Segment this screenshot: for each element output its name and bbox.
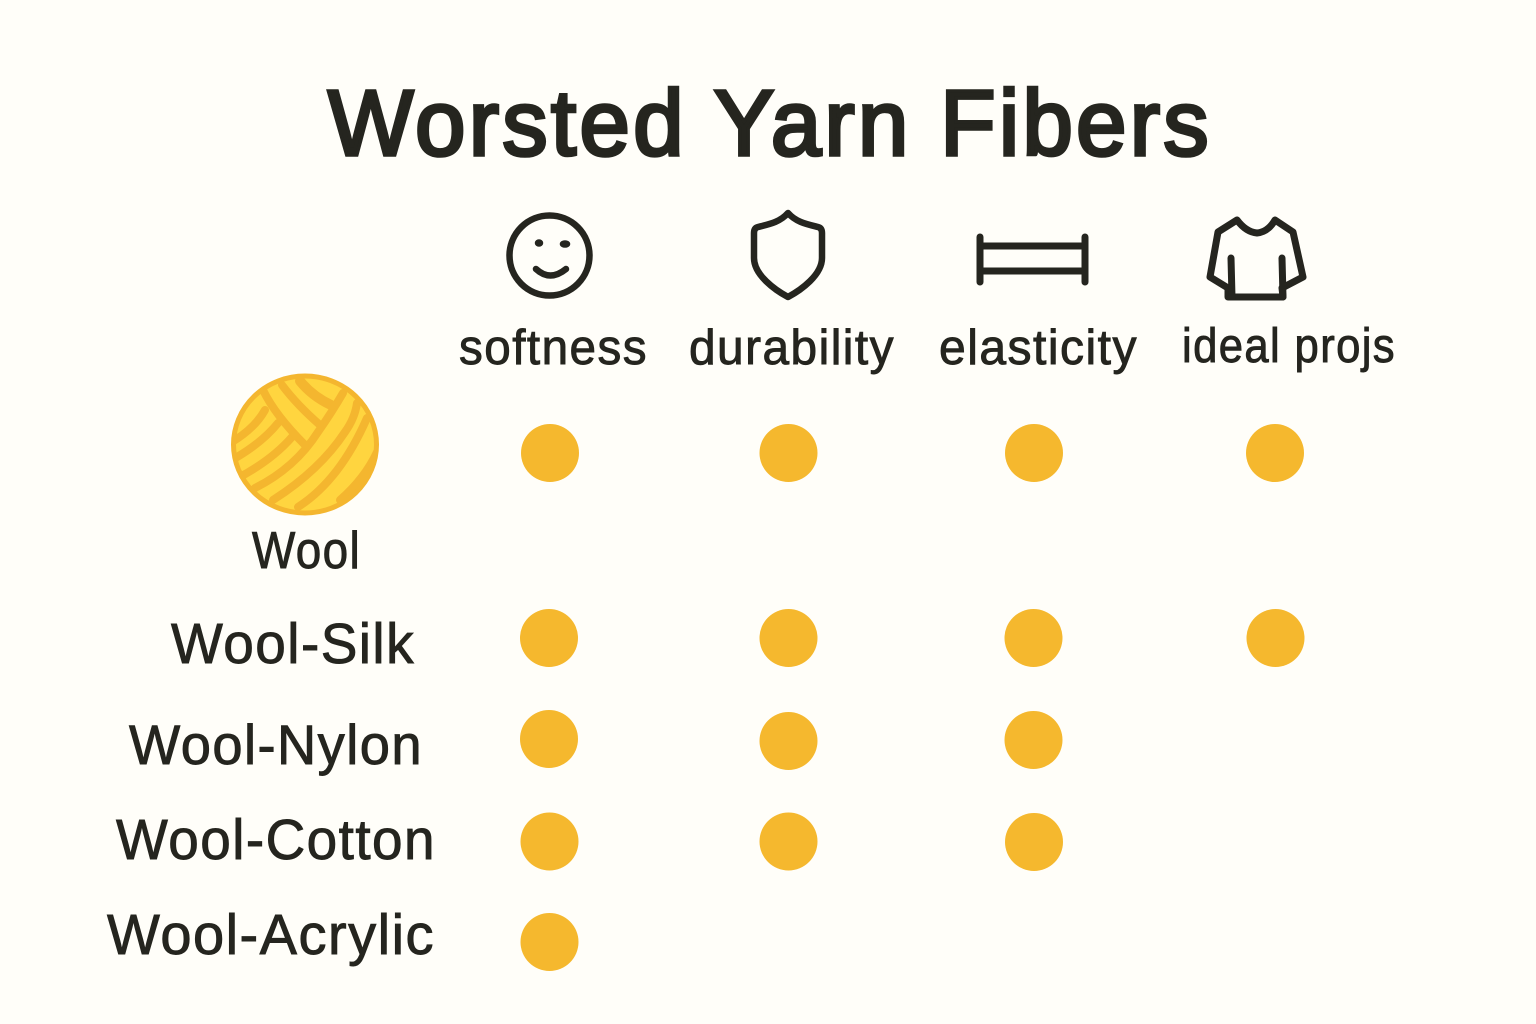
icon: stretch bar	[980, 237, 1085, 282]
label: Wool-Silk: Wool-Silk	[171, 612, 415, 676]
icon: shield	[754, 213, 822, 297]
ratings: Wool-Cotton	[520, 812, 1063, 871]
row: Wool-Acrylic	[107, 903, 578, 971]
column header: elasticity	[939, 237, 1138, 375]
icon: yarn ball	[232, 376, 377, 513]
label: softness: softness	[459, 321, 648, 375]
row: Wool	[232, 376, 1304, 580]
label: durability: durability	[689, 321, 895, 375]
label: ideal projs: ideal projs	[1182, 320, 1396, 373]
column header: ideal projects	[1182, 220, 1396, 373]
column header: durability	[689, 213, 895, 375]
row: Wool-Nylon	[129, 710, 1062, 776]
icon: smiley face	[510, 216, 590, 296]
label: Wool-Nylon: Wool-Nylon	[129, 713, 423, 776]
title: Worsted Yarn Fibers	[328, 71, 1212, 175]
label: elasticity: elasticity	[939, 321, 1138, 375]
ratings: Wool-Acrylic	[520, 913, 578, 971]
row: Wool-Silk	[171, 609, 1304, 676]
ratings: Wool-Nylon	[520, 710, 1062, 770]
label: Wool: Wool	[252, 522, 361, 580]
label: Wool-Acrylic: Wool-Acrylic	[107, 903, 435, 967]
ratings: Wool-Silk	[520, 609, 1304, 667]
label: Wool-Cotton: Wool-Cotton	[116, 808, 436, 872]
icon: sweater	[1210, 220, 1303, 297]
ratings: Wool	[521, 424, 1304, 482]
row: Wool-Cotton	[116, 808, 1063, 872]
column header: softness	[459, 216, 648, 375]
